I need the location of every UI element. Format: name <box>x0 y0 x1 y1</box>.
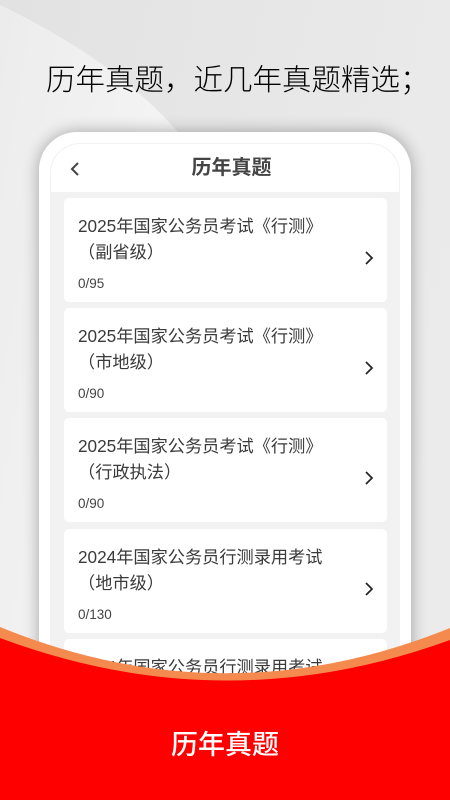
card title: （地市级） <box>78 573 164 593</box>
icon: back arrow <box>70 162 79 176</box>
card title: 2025年国家公务员考试《行测》 <box>78 216 322 236</box>
card title: 2024年国家公务员行测录用考试 <box>78 547 322 567</box>
title: 历年真题，近几年真题精选； <box>46 64 430 97</box>
panel: phone frame <box>39 132 411 800</box>
card 4 <box>64 529 387 633</box>
card title: （行政执法） <box>78 462 181 482</box>
footer label: 历年真题 <box>171 730 279 760</box>
progress: 0/90 <box>78 386 104 401</box>
icon: chevron <box>366 582 374 596</box>
nav title: 历年真题 <box>192 157 272 179</box>
card 2 <box>64 308 387 412</box>
card title: （副省级） <box>78 242 164 262</box>
card title: 2024年国家公务员行测录用考试 <box>78 657 322 677</box>
progress: 0/95 <box>78 276 104 291</box>
card title <box>78 436 322 482</box>
navigation bar <box>51 144 401 192</box>
card 1 <box>64 198 387 302</box>
card title: 2025年国家公务员考试《行测》 <box>78 326 322 346</box>
card 5 <box>64 639 387 800</box>
card 3 <box>64 418 387 522</box>
card title <box>78 326 322 372</box>
card title <box>78 547 322 593</box>
panel: phone screen <box>50 143 400 800</box>
card title: （市地级） <box>78 352 164 372</box>
icon: chevron <box>366 361 374 375</box>
card title <box>78 216 322 262</box>
red curved footer <box>0 627 450 800</box>
icon: chevron <box>366 471 374 485</box>
progress: 0/90 <box>78 496 104 511</box>
progress: 0/130 <box>78 607 112 622</box>
icon: chevron <box>366 251 374 265</box>
card title: 2025年国家公务员考试《行测》 <box>78 436 322 456</box>
